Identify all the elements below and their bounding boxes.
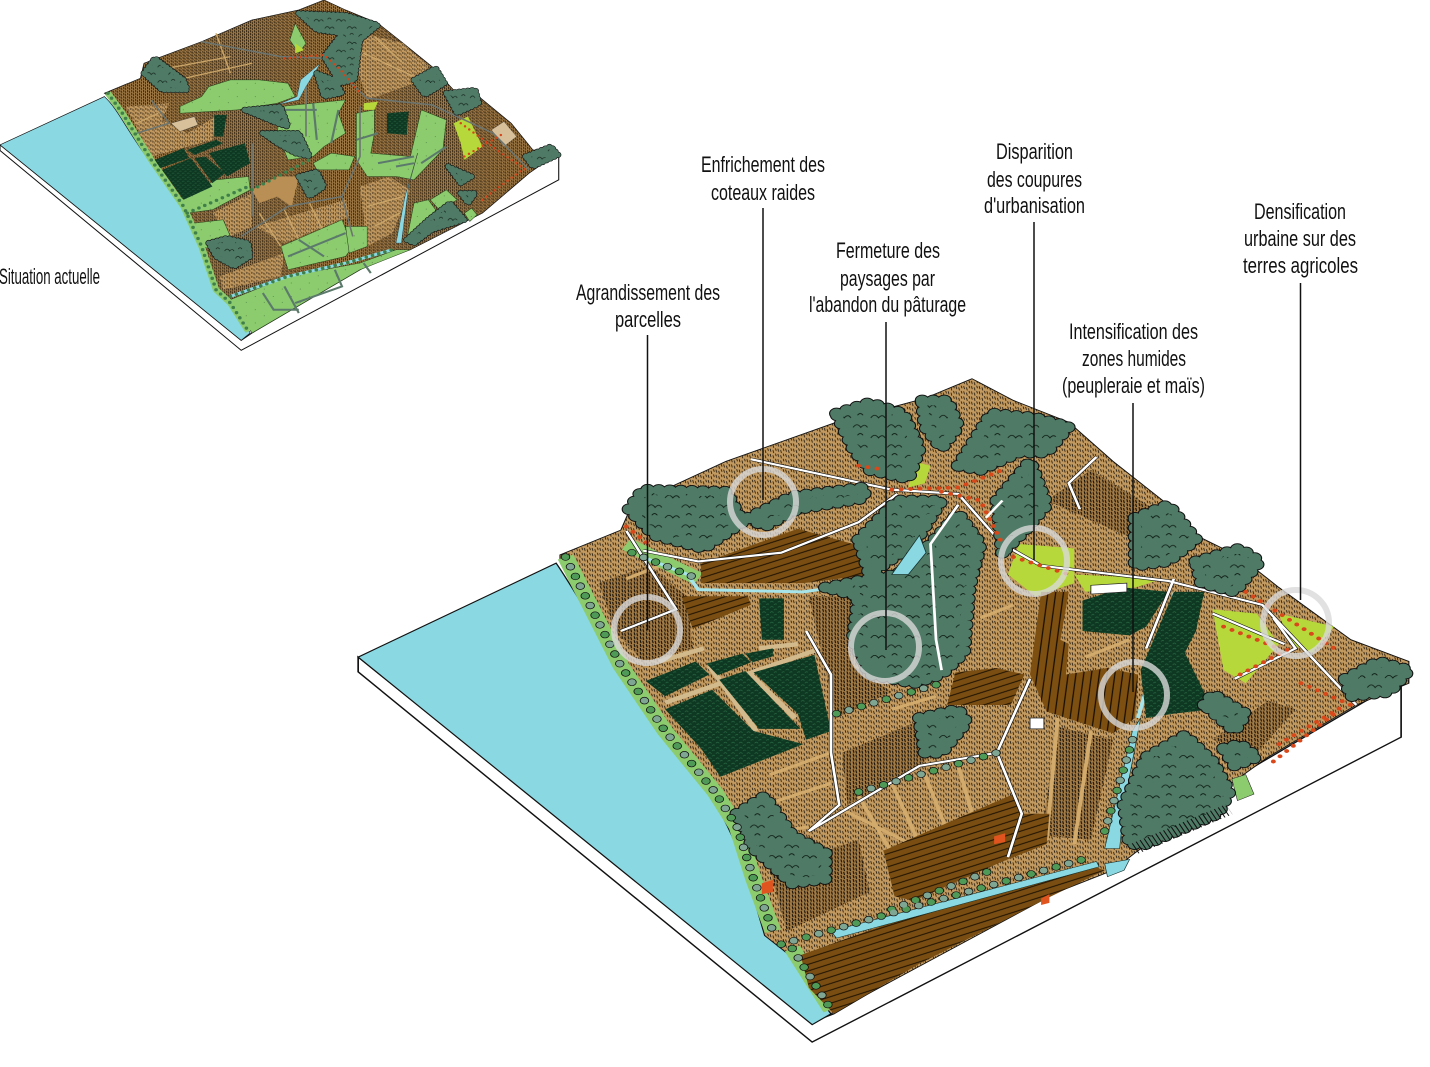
forests [144, 13, 558, 266]
small streams [643, 557, 1175, 718]
farm tracks in orchards [660, 644, 814, 731]
roads [621, 457, 1356, 857]
callout: disparition des coupures d'urbanisation: des coupures [987, 167, 1082, 192]
hedges on meadows [248, 103, 446, 313]
block side faces [358, 657, 1401, 1042]
orchards and poplars [646, 588, 1213, 777]
lower river, canal and upper stream [831, 718, 1141, 938]
meadows [180, 23, 477, 333]
callout: densification urbaine: urbaine sur des [1244, 226, 1356, 251]
callout: intensification des zones humides: Intensification des [1069, 319, 1198, 344]
main block diagram: projected landscape [358, 379, 1409, 1042]
woodland masses [629, 400, 1409, 883]
tan parcel tracks [626, 561, 1138, 853]
tan vineyard parcels [126, 33, 428, 290]
water surface [0, 97, 250, 340]
lime and meadow strips [908, 461, 1334, 683]
callout: intensification des zones humides [1062, 319, 1205, 692]
callout: disparition des coupures d'urbanisation: Disparition [996, 139, 1073, 164]
block side faces [0, 145, 559, 350]
river and pond [277, 63, 418, 243]
callout: densification urbaine: Densification [1254, 199, 1346, 224]
land base with vineyards [560, 379, 1409, 1014]
highlight ring: densification [1263, 590, 1329, 656]
callout: enfrichement des coteaux raides: coteaux raides [711, 180, 815, 205]
callout: agrandissement des parcelles [576, 280, 720, 630]
tan parcel tracks [137, 33, 421, 246]
highlight ring: fermeture [851, 613, 919, 681]
left bank green strip [566, 544, 831, 1009]
small block diagram: situation actuelle [0, 0, 559, 350]
left bank green strip [108, 93, 248, 331]
callout: fermeture des paysages: l'abandon du pâturage [809, 292, 966, 317]
meadow patch [1232, 775, 1254, 801]
lime garden patches [295, 43, 482, 160]
caption: situation actuelle: Situation actuelle [0, 264, 100, 289]
callout: enfrichement des coteaux raides [701, 152, 825, 500]
ploughed corn field [1030, 592, 1138, 733]
central forest road [931, 500, 1002, 670]
bank trees [108, 93, 392, 331]
bare tan ground [252, 176, 299, 206]
orchards [155, 112, 409, 200]
callout: intensification des zones humides: zones humides [1082, 346, 1186, 371]
farm buildings [1030, 583, 1127, 729]
darker vineyard parcels [599, 470, 1295, 931]
village and suburb houses [626, 466, 1351, 762]
pale sandy plots [171, 117, 517, 147]
tree trunks under the lower-right wood [1135, 809, 1229, 848]
village houses [284, 55, 526, 200]
callout: agrandissement des parcelles: parcelles [615, 307, 681, 332]
callout: densification urbaine: terres agricoles [1243, 253, 1358, 278]
callout: disparition des coupures d'urbanisation [984, 139, 1085, 560]
callout: enfrichement des coteaux raides: Enfrichement des [701, 152, 825, 177]
highlight ring: intensification [1101, 662, 1167, 728]
roads [137, 42, 529, 236]
highlight ring: enfrichement [730, 469, 796, 535]
land base with vineyards [104, 0, 558, 333]
callout: fermeture des paysages: Fermeture des [836, 238, 940, 263]
callout: agrandissement des parcelles: Agrandissement des [576, 280, 720, 305]
callout: fermeture des paysages [809, 238, 966, 650]
ploughed brown fields [682, 529, 1105, 1014]
pond [892, 535, 926, 574]
water surface [358, 563, 831, 1025]
callout: disparition des coupures d'urbanisation: d'urbanisation [984, 193, 1085, 218]
bank trees [566, 553, 1135, 1009]
highlight ring: agrandissement [614, 597, 680, 663]
callout: fermeture des paysages: paysages par [840, 266, 935, 291]
callout: intensification des zones humides: (peupleraie et maïs) [1062, 373, 1205, 398]
highlight ring: disparition [1001, 528, 1067, 594]
callout: densification urbaine [1243, 199, 1358, 600]
